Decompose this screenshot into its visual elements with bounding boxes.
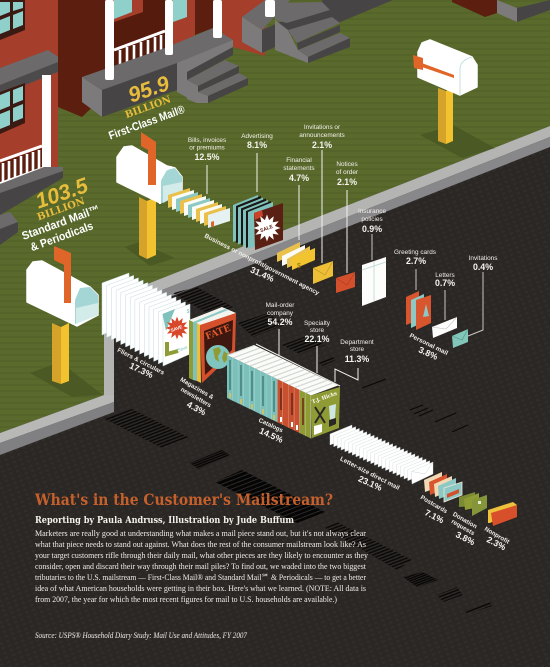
stack: fliers and circulars: SAVE [170,324,183,333]
label: invitations or announcements: Invitations or [304,124,341,131]
label: mail-order company: company [267,310,294,317]
label: advertising: Advertising [241,133,273,140]
label: magazines and newsletters: 4.3% [185,399,208,418]
label: specialty store: Specialty [304,320,331,327]
document: insurance policies [362,257,386,306]
label: bills, invoices or premiums: or premiums [189,144,225,152]
label: bills, invoices or premiums: 12.5% [195,152,220,162]
label: donation requests: requests [450,518,476,537]
intro text: your target customers rifle through their daily mail, what other pieces are they likely to encounter as they [35,550,369,560]
label: invitations or announcements: announcements [299,132,345,139]
first-class total: BILLION [124,94,173,121]
house: second porch and steps [242,0,393,63]
mailbox: top right [413,40,495,158]
label: notices of order [336,161,359,187]
label: financial statements [283,157,315,183]
standard mail total: & Periodicals [29,220,95,254]
label: greeting cards [394,249,436,266]
house: far right [452,0,550,22]
label: catalogs [257,417,285,445]
stack: magazines and newsletters [189,307,236,383]
label: specialty store: 22.1% [305,334,330,344]
label: letters: 0.7% [435,278,455,288]
intro text [35,528,369,604]
stack: advertising [233,195,283,250]
label: department store [340,339,374,364]
label: nonprofit: 2.3% [485,534,508,552]
stack: fliers and circulars [102,273,190,366]
stack: bills, invoices [168,188,230,228]
label: financial statements: 4.7% [289,173,309,183]
label: greeting cards: 2.7% [406,256,426,266]
mailbox: Standard Mail [27,246,103,397]
intro text: consider, open and discard their way through their mail piles? To find out, we waded into the two biggest [35,561,367,571]
label: invitations [469,255,497,272]
intro text: tributaries to the U.S. mailstream — First-Class Mail® and Standard Mail℠ & Periodicals — to get a better [35,572,366,582]
label: letter-size direct mail: 23.1% [357,474,384,493]
source: Source: USPS® Household Diary Study: Mail Use and Attitudes, FY 2007 [35,630,248,640]
intro text: from 2007, the year for which the most recent figures for mail to U.S. households are available.) [35,594,337,604]
label: donation requests [450,511,478,547]
stack: catalogs: T.J. Hicks [311,391,338,405]
first-class total: 95.9 [125,71,172,108]
label: donation requests: Donation [451,511,478,531]
label: department store: store [350,346,365,353]
label: department store: Department [340,339,374,346]
label: insurance policies: Insurance [358,208,386,215]
standard mail total: BILLION [36,196,87,223]
house: left [0,0,63,245]
label: notices of order: Notices [336,161,358,168]
stack: nonprofit [488,502,517,526]
label: mail-order company: 54.2% [268,317,293,327]
byline: Reporting by Paula Andruss, Illustration by Jude Buffum [35,516,294,526]
label: invitations or announcements: 2.1% [312,140,332,150]
stack: fliers and circulars: $ [187,309,190,315]
label: invitations: 0.4% [473,262,493,272]
label: magazines and newsletters: newsletters [179,386,213,410]
label: personal mail: Personal mail [408,332,449,357]
label: notices of order: of order [336,169,359,176]
label: business or nonprofit/government agency: Business or nonprofit/government agency [203,232,321,297]
label: postcards [419,494,449,525]
label: personal mail: 3.8% [417,345,440,362]
label: letters: Letters [435,272,455,279]
label: greeting cards: Greeting cards [394,249,436,256]
envelope: invitations or announcements [313,261,333,284]
label: invitations: Invitations [469,255,497,262]
first-class total [107,71,187,142]
invitation envelope [452,329,468,348]
label: advertising: 8.1% [247,140,267,150]
label: financial statements: Financial [286,157,312,164]
label: catalogs: 14.5% [258,426,285,445]
intro text: what that piece needs to stand out against. What does the rest of the consumer mailstream look like? As [35,539,367,549]
leader lines [207,150,483,386]
label: nonprofit: Nonprofit [483,526,511,546]
lawn [0,0,550,433]
first-class total: First-Class Mail® [107,104,187,142]
label: catalogs: Catalogs [257,417,284,435]
label: insurance policies: 0.9% [362,224,382,234]
label: business or nonprofit/government agency: 31.4% [249,265,276,284]
label: fliers and circulars: Fliers & circulars [116,347,166,377]
greeting cards [406,291,431,330]
label: bills, invoices or premiums [188,137,226,162]
label: advertising [241,133,273,150]
label: letter-size direct mail: Letter-size direct mail [339,456,401,492]
stack: advertising: SALE [259,224,275,234]
label: postcards: Postcards [419,494,449,515]
label: mail-order company: Mail-order [266,302,295,309]
label: insurance policies [358,208,386,234]
label: invitations or announcements [299,124,345,150]
label: mail-order company [266,302,295,327]
title: What's in the Customer's Mailstream? [34,490,333,509]
road shadows of mail pieces [103,287,492,614]
stack: letter-size direct mail [330,425,433,484]
stack: financial statements [277,242,315,270]
house: center [58,0,265,117]
label: specialty store [304,320,331,344]
label: donation requests: 3.8% [454,529,477,547]
stack: catalogs [227,345,340,438]
label: postcards: 7.1% [423,507,446,525]
label: bills, invoices or premiums: Bills, invoices [188,137,226,144]
stack: donation requests [459,492,487,516]
standard mail total: Standard Mail™ [20,204,102,243]
label: notices of order: 2.1% [337,177,357,187]
stack: fliers and circulars: Save [177,344,189,353]
label: department store: 11.3% [345,354,369,364]
label: insurance policies: policies [361,216,383,223]
label: letters [435,272,455,288]
label: financial statements: statements [283,165,315,172]
envelope: notices of order [336,272,355,293]
intro text: Marketers are really good at understanding what makes a mail piece stand out, but it's not always clear [35,528,366,538]
letter [432,317,457,338]
standard mail total [20,173,102,254]
curb [0,126,550,455]
standard mail total: 103.5 [32,173,92,213]
stack: magazines and newsletters: FATE [204,323,232,342]
label: magazines and newsletters [179,376,215,418]
stack: financial statements: $ [297,263,301,270]
intro text: idea of what American households were getting in their box. Here's what we learned. (NOTE: All data is [35,583,367,593]
stack: postcards [424,472,462,502]
label: specialty store: store [310,327,325,334]
mailbox: First-Class [117,132,182,266]
label: fliers and circulars: 17.3% [128,360,155,380]
label: magazines and newsletters: Magazines & [179,376,215,401]
